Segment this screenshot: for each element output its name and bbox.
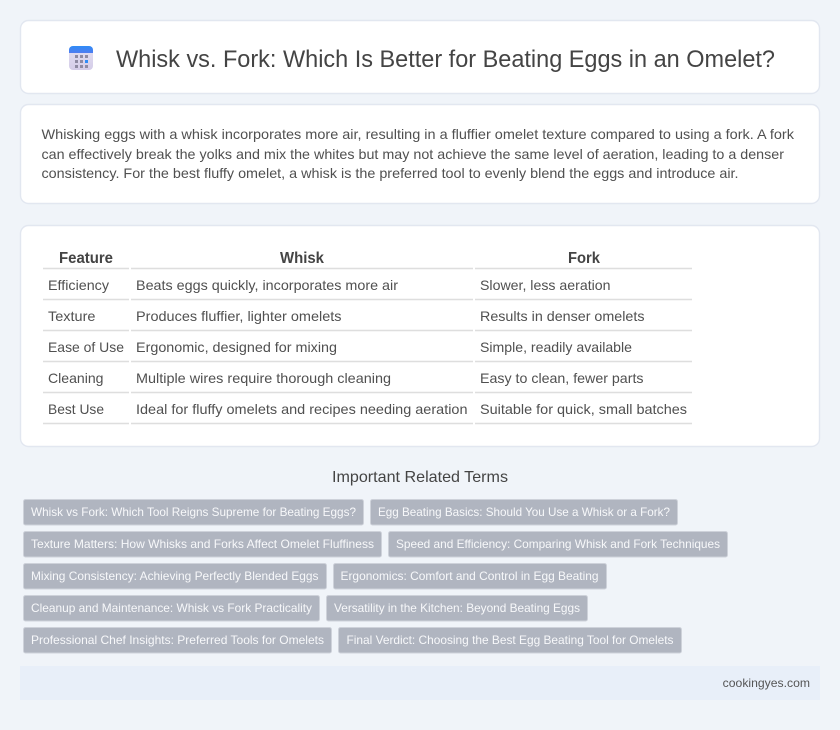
text block: summary paragraph — [42, 126, 795, 181]
table row: texture: Texture — [48, 308, 96, 324]
table row: cleaning — [43, 370, 692, 392]
table row: ease of use — [43, 339, 692, 362]
heading: important related terms: Important Related Terms — [332, 469, 508, 486]
tag: versatility: Versatility in the Kitchen: Beyond Beating Eggs — [334, 601, 580, 615]
title: Whisk vs. Fork: Which Is Better for Beating Eggs in an Omelet? — [116, 46, 775, 73]
table row: ease of use: Simple, readily available — [480, 339, 632, 355]
table header row — [43, 250, 692, 268]
table row: efficiency: Slower, less aeration — [480, 277, 610, 293]
tag: egg beating basics — [370, 500, 678, 525]
tag: egg beating basics: Egg Beating Basics: Should You Use a Whisk or a Fork? — [378, 505, 670, 519]
tag: versatility — [326, 596, 588, 621]
text block: summary paragraph: can effectively break the yolks and mix the whites but may not achieve the same level of aeration, leading to a denser — [42, 146, 784, 162]
tag: ergonomics — [334, 564, 606, 589]
tag: mixing consistency: Mixing Consistency: Achieving Perfectly Blended Eggs — [31, 569, 318, 583]
footer bar — [20, 666, 820, 700]
table row: efficiency: Beats eggs quickly, incorporates more air — [136, 277, 398, 293]
table header row: Whisk — [280, 250, 324, 267]
table row: best use: Best Use — [48, 401, 104, 417]
tag: ergonomics: Ergonomics: Comfort and Control in Egg Beating — [340, 569, 598, 583]
text block: summary paragraph: consistency. For the best fluffy omelet, a whisk is the preferred tool to evenly blend the eggs and introduce air. — [42, 165, 738, 181]
icon: calendar grid — [69, 46, 93, 70]
tag: mixing consistency — [24, 564, 326, 589]
table row: texture: Produces fluffier, lighter omelets — [136, 308, 342, 324]
table row: best use — [43, 401, 692, 424]
text block: summary paragraph: Whisking eggs with a whisk incorporates more air, resulting in a fluffier omelet texture compared to using a fork. A fork — [42, 126, 795, 142]
panel: comparison table — [20, 226, 820, 446]
table row: ease of use: Ergonomic, designed for mixing — [136, 339, 337, 355]
table row: ease of use: Ease of Use — [48, 339, 124, 355]
table row: efficiency — [43, 277, 692, 300]
tag: final verdict: Final Verdict: Choosing the Best Egg Beating Tool for Omelets — [346, 633, 674, 647]
tag: speed and efficiency — [388, 532, 728, 557]
tag list: related terms — [24, 500, 728, 653]
table row: cleaning: Cleaning — [48, 370, 104, 386]
table row: cleaning: Easy to clean, fewer parts — [480, 370, 644, 386]
table header row: Fork — [568, 250, 600, 267]
table row: efficiency: Efficiency — [48, 277, 109, 293]
tag: professional chef insights — [24, 628, 332, 653]
tag: cleanup and maintenance — [24, 596, 320, 621]
table row: texture: Results in denser omelets — [480, 308, 644, 324]
table row: best use: Suitable for quick, small batches — [480, 401, 687, 417]
tag: speed and efficiency: Speed and Efficiency: Comparing Whisk and Fork Techniques — [396, 537, 720, 551]
panel: introduction text — [20, 104, 820, 204]
tag: cleanup and maintenance: Cleanup and Maintenance: Whisk vs Fork Practicality — [31, 601, 312, 615]
table row: best use: Ideal for fluffy omelets and recipes needing aeration — [136, 401, 468, 417]
panel: title header — [20, 20, 820, 94]
tag: whisk vs fork — [24, 500, 364, 525]
tag: professional chef insights: Professional Chef Insights: Preferred Tools for Omelets — [31, 633, 324, 647]
table row: cleaning: Multiple wires require thorough cleaning — [136, 370, 391, 386]
table header row: Feature — [59, 250, 113, 267]
tag: whisk vs fork: Whisk vs Fork: Which Tool Reigns Supreme for Beating Eggs? — [31, 505, 356, 519]
tag: texture matters: Texture Matters: How Whisks and Forks Affect Omelet Fluffiness — [31, 537, 374, 551]
tag: final verdict — [338, 628, 682, 653]
footer source text: cookingyes.com — [723, 676, 810, 690]
table row: texture — [43, 308, 692, 330]
tag: texture matters — [24, 532, 382, 557]
